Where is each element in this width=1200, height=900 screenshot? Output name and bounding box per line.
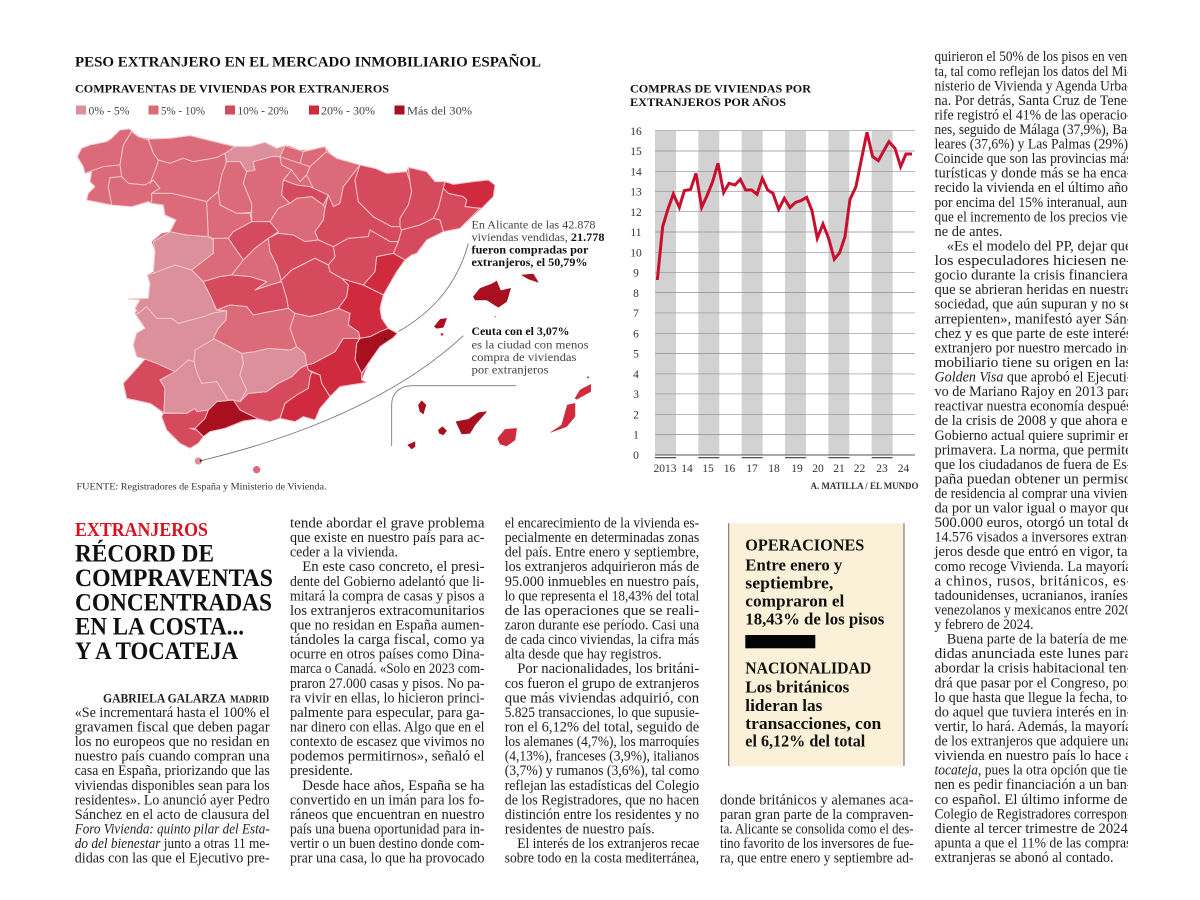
article column 1: Sánchez en el acto de clausura del [75,807,270,823]
map legend: Más del 30% [407,106,472,118]
highlight: operaciones: Entre enero y [745,556,843,575]
article column 5: 14.576 visados a inversores extran- [934,530,1132,546]
article column 5: ta, tal como reflejan los datos del Mi- [934,64,1132,80]
article column 1 [74,705,270,867]
x axis labels: 2013 [654,463,677,475]
article column 2: que existe en nuestro país para ac- [290,530,484,546]
article column 5: chez y es que parte de este interés [934,326,1132,342]
kicker: EXTRANJEROS [75,519,208,541]
headline: COMPRAVENTAS [75,565,273,592]
article column 5: do aquel que tuviera interés en in- [934,704,1132,720]
highlight: nacionalidad: lideran las [745,696,823,715]
article column 2 [290,516,485,867]
article column 5: arrepienten», manifestó ayer Sán- [934,311,1132,327]
article column 2: Desde hace años, España se ha [302,778,485,794]
chart title: EXTRANJEROS POR AÑOS [630,95,786,109]
article column 5: Colegio de Registradores correspon- [934,806,1132,822]
article column 2: que no residan en España aumen- [290,618,484,634]
article column 4: tino favorito de los inversores de fue- [720,836,914,852]
article column 2: podemos permitirnos», señaló el [290,749,484,765]
article column 3 [505,516,700,867]
article column 5: reactivar nuestra economía después [934,399,1132,415]
article column 2: dente del Gobierno adelantó que li- [290,574,484,590]
article column 2: país una buena oportunidad para in- [290,822,484,838]
x axis labels: 19 [791,463,803,475]
article column 1: viviendas disponibles sean para los [75,778,270,794]
article column 5: co español. El último informe del [934,792,1132,808]
x axis labels: 24 [898,463,910,475]
map legend: 20% - 30% [321,106,375,118]
article column 2: ráneos que encuentran en nuestro [290,807,484,823]
Ceuta and Melilla [195,457,260,473]
article column 5: primavera. La norma, que permite [934,442,1132,458]
article column 3: 5.825 transacciones, lo que supusie- [505,705,699,721]
article column 5: los especuladores hiciesen ne- [934,253,1132,269]
article column 2: ra vivir en ellas, lo hicieron princi- [290,690,484,706]
article column 1: casa en España, priorizando que las [75,763,270,779]
article column 5 [934,49,1132,866]
article column 2: prar una casa, lo que ha provocado [290,851,484,867]
article column 3: sobre todo en la costa mediterránea, [505,851,699,867]
article column 1: do del bienestar junto a otras 11 me- [75,836,270,852]
article column 5: vertir, lo hará. Además, la mayoría [934,719,1132,735]
article column 5: y febrero de 2024. [934,617,1034,633]
x axis labels: 21 [833,463,845,475]
article column 3: Por nacionalidades, los británi- [517,661,699,677]
article column 3: que más viviendas adquirió, con [505,690,700,706]
article column 5: Gobierno actual quiere suprimir en [934,428,1132,444]
credit: A. MATILLA / EL MUNDO [810,482,918,492]
article column 5: «Es el modelo del PP, dejar que [947,238,1132,254]
article column 5: sociedad, que aún supuran y no se [934,297,1132,313]
article column 1: didas con las que el Ejecutivo pre- [75,851,270,867]
y axis labels [630,126,642,462]
article column 3: de cada cinco viviendas, la cifra más [505,632,699,648]
article column 5: leares (37,6%) y Las Palmas (29%). [934,137,1132,153]
x axis labels: 18 [768,463,780,475]
callout: Alicante: extranjeros, el 50,79% [472,257,588,269]
article column 3: alta desde que hay registros. [505,647,662,663]
article column 3: (3,7%) y rumanos (3,6%), tal como [505,763,699,779]
chart title: COMPRAS DE VIVIENDAS POR [630,82,811,96]
article column 5: Coincide que son las provincias más [934,151,1132,167]
article column 1: Foro Vivienda: quinto pilar del Esta- [74,822,270,838]
article column 2: los extranjeros extracomunitarios [290,603,485,619]
article column 5: nisterio de Vivienda y Agenda Urba- [934,78,1132,94]
article column 4: donde británicos y alemanes aca- [720,792,914,808]
article column 1: gravamen fiscal que deben pagar [75,720,270,736]
article column 3: El interés de los extranjeros recae [517,836,699,852]
article column 2: convertido en un imán para los fo- [290,792,484,808]
highlight: operaciones: compraron el [745,591,845,610]
source note: FUENTE: Registradores de España y Ministerio de Vivienda. [76,482,326,492]
y axis labels: 9 [633,268,639,280]
callout leader lines and Canary frame [201,243,516,461]
y axis labels: 6 [633,328,639,340]
byline: GABRIELA GALARZA [103,690,227,705]
article column 5: diente al tercer trimestre de 2024, [934,821,1132,837]
article column 5: Golden Visa que aprobó el Ejecuti- [934,370,1132,386]
headline: Y A TOCATEJA [75,638,238,665]
black separator bar [745,635,815,648]
headline: CONCENTRADAS [75,589,272,616]
article column 5: que los ciudadanos de fuera de Es- [934,457,1132,473]
article column 5: venezolanos y mexicanos entre 2020 [934,602,1132,618]
callout: Ceuta: es la ciudad con menos [472,339,589,351]
Canary Islands [408,376,591,449]
article column 3: cos fueron el grupo de extranjeros [505,676,699,692]
y axis labels: 7 [633,308,639,320]
article column 3: del país. Entre enero y septiembre, [505,545,699,561]
y axis labels: 10 [630,248,642,260]
article column 3: ron el 6,12% del total, seguido de [505,720,700,736]
byline: MADRID [230,694,269,705]
article column 5: rife registró el 41% de las operacio- [934,107,1132,123]
article column 5: extranjeras se abonó al contado. [934,850,1114,866]
article column 5: nes, seguido de Málaga (37,9%), Ba- [934,122,1132,138]
article column 2: En este caso concreto, el presi- [302,559,485,575]
article column 3: el encarecimiento de la vivienda es- [505,516,699,532]
y axis labels: 11 [630,227,642,239]
article column 5: turísticas y donde más se ha enca- [934,166,1132,182]
article column 5: na. Por detrás, Santa Cruz de Tene- [934,93,1132,109]
highlight: nacionalidad [745,658,881,751]
article column 2: presidente. [290,763,353,779]
article column 5: 500.000 euros, otorgó un total de [934,515,1132,531]
article column 3: reflejan las estadísticas del Colegio [505,778,699,794]
highlight: nacionalidad: Los británicos [745,678,850,697]
article column 3: los extranjeros adquirieron más de [505,559,700,575]
y axis labels: 12 [630,207,642,219]
article column 5: gocio durante la crisis financiera, [934,268,1132,284]
y axis labels: 1 [633,430,639,442]
callout: Ceuta: Ceuta con el 3,07% [472,326,570,338]
headline: RÉCORD DE [75,540,214,568]
article column 5: vo de Mariano Rajoy en 2013 para [934,384,1132,400]
article column 2: ceder a la vivienda. [290,545,398,561]
callout anchor dots [200,338,386,462]
y axis labels: 8 [633,288,639,300]
highlight: operaciones: 18,43% de los pisos [745,609,885,628]
article column 5: drá que pasar por el Congreso, por [934,675,1132,691]
article column 1: nuestro país cuando compran una [75,749,270,765]
choropleth map of Spain [77,129,591,473]
article column 5: da por un valor igual o mayor que [934,501,1132,517]
article column 5: Buena parte de la batería de me- [947,632,1132,648]
Balearic Islands [434,274,538,336]
y axis labels: 14 [630,166,642,178]
article column 3: de los Registradores, que no hacen [505,792,700,808]
article column 4: ra, que entre enero y septiembre ad- [720,851,914,867]
highlight: nacionalidad: NACIONALIDAD [745,658,871,677]
callout: Alicante: En Alicante de las 42.878 [472,220,596,232]
headline [75,540,273,665]
map subtitle: COMPRAVENTAS DE VIVIENDAS POR EXTRANJEROS [75,81,389,95]
callout: Alicante: viviendas vendidas, 21.778 [472,232,605,244]
article column 5: quirieron el 50% de los pisos en ven- [934,49,1132,65]
y axis labels: 4 [633,369,639,381]
article column 5: de residencia al comprar una vivien- [934,486,1132,502]
callout: Alicante: fueron compradas por [472,244,588,256]
highlight: nacionalidad: el 6,12% del total [745,732,866,751]
article column 3: zaron durante ese período. Casi una [505,618,700,634]
highlight: nacionalidad: transacciones, con [745,714,881,733]
article column 4: paran gran parte de la compraven- [720,807,914,823]
y axis labels: 0 [633,450,639,462]
y axis labels: 3 [633,389,639,401]
article column 3: distinción entre los residentes y no [505,807,699,823]
article column 5: lo que hasta que llegue la fecha, to- [934,690,1132,706]
article column 3: 95.000 inmuebles en nuestro país, [505,574,699,590]
article column 2: mitará la compra de casas y pisos a [290,588,485,604]
highlight: operaciones: OPERACIONES [745,536,864,555]
article column 5: recido la vivienda en el último año, [934,180,1132,196]
y axis labels: 2 [633,410,639,422]
y axis labels: 5 [633,348,639,360]
map legend: 10% - 20% [238,106,289,118]
x axis labels: 23 [876,463,888,475]
article column 5: por encima del 15% interanual, aun- [934,195,1132,211]
article column 5: paña puedan obtener un permiso [934,471,1132,487]
callout: Alicante [472,220,605,269]
article column 5: que se abrieran heridas en nuestra [934,282,1132,298]
article column 5: a chinos, rusos, británicos, es- [934,573,1132,589]
x axis labels: 14 [681,463,693,475]
x axis labels: 22 [854,463,866,475]
article column 5: de los extranjeros que adquiere una [934,734,1132,750]
title: PESO EXTRANJERO EN EL MERCADO INMOBILIARIO ESPAÑOL [75,52,541,70]
article column 5: tocateja, pues la otra opción que tie- [934,763,1132,779]
panel: highlights box [728,523,904,766]
article column 1: «Se incrementará hasta el 100% el [75,705,270,721]
article column 5: de la crisis de 2008 y que ahora el [934,413,1132,429]
callout: Ceuta [472,326,589,376]
highlight: operaciones: septiembre, [745,574,833,593]
article column 2: contexto de escasez que vivimos no [290,734,484,750]
callout: Ceuta: por extranjeros [472,364,549,376]
map legend: 5% - 10% [161,106,205,118]
article column 5: jeros desde que entró en vigor, tal [934,544,1132,560]
article column 3: de las operaciones que se reali- [505,603,699,619]
highlight: operaciones [745,536,885,628]
article column 1: los no europeos que no residan en [75,734,270,750]
line chart: purchases by foreigners per year [630,126,915,475]
article column 5: extranjero por nuestro mercado in- [934,340,1132,356]
chart title [630,82,811,109]
article column 3: lo que representa el 18,43% del total [505,588,699,604]
callout: Ceuta: compra de viviendas [472,352,577,364]
article column 5: vivienda en nuestro país lo hace a [934,748,1132,764]
article column 2: praron 27.000 casas y pisos. No pa- [290,676,485,692]
x axis labels: 20 [812,463,824,475]
article column 5: tadounidenses, ucranianos, iraníes, [934,588,1132,604]
article column 2: marca o Canadá. «Solo en 2023 com- [290,661,484,677]
y axis labels: 16 [630,126,642,138]
article column 2: vertir o un buen destino donde com- [290,836,485,852]
y axis labels: 15 [630,146,642,158]
article column 5: como recoge Vivienda. La mayoría [934,559,1132,575]
article column 3: residentes de nuestro país. [505,822,655,838]
x axis labels: 16 [724,463,736,475]
article column 5: ne de antes. [934,224,1002,240]
article column 5: apunta a que el 11% de las compras [934,835,1132,851]
article column 3: pecialmente en determinadas zonas [505,530,699,546]
article column 4: ta. Alicante se consolida como el des- [720,822,914,838]
article column 2: palmente para especular, para ga- [290,705,485,721]
article column 5: que el incremento de los precios vie- [934,209,1132,225]
x axis labels: 15 [702,463,714,475]
article column 5: didas anunciada este lunes para [934,646,1132,662]
article column 2: nar dinero con ellas. Algo que en el [290,720,484,736]
map legend: 0% - 5% [88,106,130,118]
article column 2: tende abordar el grave problema [290,516,485,532]
article column 2: tándoles la carga fiscal, como ya [290,632,485,648]
article column 5: nen es pedir financiación a un ban- [934,777,1132,793]
article column 4 [720,792,914,867]
y axis labels: 13 [630,186,642,198]
x axis labels [654,463,910,475]
article column 3: los alemanes (4,7%), los marroquíes [505,734,699,750]
article column 1: residentes». Lo anunció ayer Pedro [75,792,270,808]
x axis labels: 17 [746,463,758,475]
map legend [76,106,472,118]
headline: EN LA COSTA... [75,614,244,640]
article column 3: (4,13%), franceses (3,9%), italianos [505,749,699,765]
article column 5: mobiliario tiene su origen en las [934,355,1132,371]
article column 2: ocurre en otros países como Dina- [290,647,484,663]
article column 5: abordar la crisis habitacional ten- [934,661,1132,677]
